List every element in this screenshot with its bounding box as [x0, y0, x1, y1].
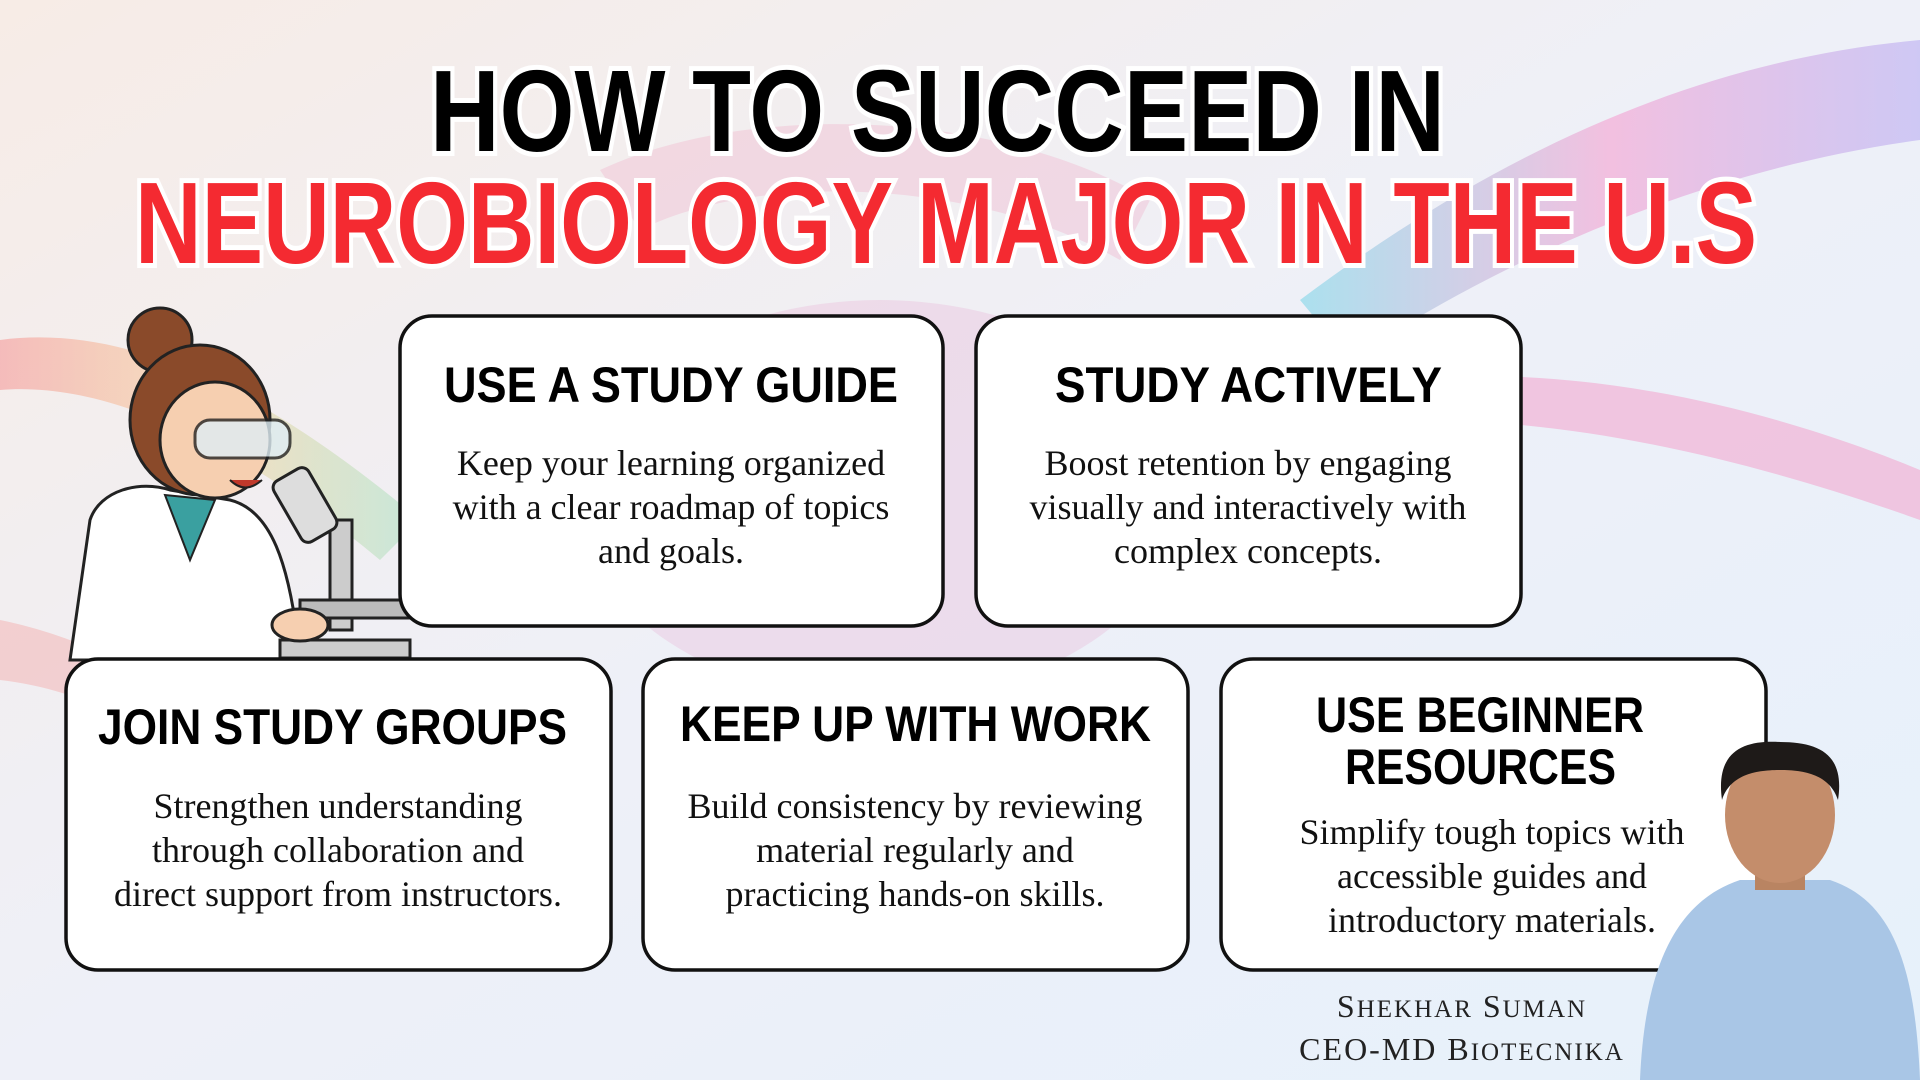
- author name: CEO-MD BIOTECNIKA: [1299, 1031, 1625, 1067]
- card: study actively: [976, 316, 1521, 626]
- card: join study groups: through collaboration and: [152, 830, 524, 870]
- author name: SHEKHAR SUMAN: [1337, 988, 1587, 1024]
- card: keep up with work: KEEP UP WITH WORK: [680, 696, 1151, 752]
- card: use beginner resources: Simplify tough topics with: [1299, 812, 1685, 852]
- card: join study groups: Strengthen understanding: [154, 786, 522, 826]
- card: use beginner resources: introductory materials.: [1328, 900, 1656, 940]
- card: study actively: STUDY ACTIVELY: [1055, 357, 1442, 413]
- card: study actively: complex concepts.: [1114, 531, 1382, 571]
- card: join study groups: direct support from instructors.: [114, 874, 562, 914]
- card: join study groups: JOIN STUDY GROUPS: [98, 699, 567, 755]
- card: use beginner resources: accessible guides and: [1337, 856, 1647, 896]
- card: use a study guide: Keep your learning organized: [457, 443, 885, 483]
- card: use beginner resources: USE BEGINNER: [1316, 687, 1644, 743]
- illustration: scientist with microscope: [70, 308, 410, 660]
- author name: [1299, 988, 1625, 1067]
- card: keep up with work: practicing hands-on skills.: [726, 874, 1104, 914]
- card: study actively: visually and interactively with: [1030, 487, 1466, 527]
- card: study actively: Boost retention by engaging: [1045, 443, 1451, 483]
- title: HOW TO SUCCEED IN: [430, 46, 1445, 176]
- photo: presenter: [1640, 742, 1920, 1080]
- card: use a study guide: [400, 316, 943, 626]
- card: join study groups: [66, 659, 611, 970]
- card: keep up with work: Build consistency by reviewing: [688, 786, 1142, 826]
- card: keep up with work: [643, 659, 1188, 970]
- card: use beginner resources: RESOURCES: [1345, 739, 1616, 795]
- title: [135, 46, 1757, 288]
- card: use beginner resources: [1221, 659, 1766, 970]
- card: use a study guide: and goals.: [598, 531, 744, 571]
- card: use a study guide: USE A STUDY GUIDE: [444, 357, 898, 413]
- card: use a study guide: with a clear roadmap of topics: [453, 487, 889, 527]
- card: keep up with work: material regularly and: [756, 830, 1074, 870]
